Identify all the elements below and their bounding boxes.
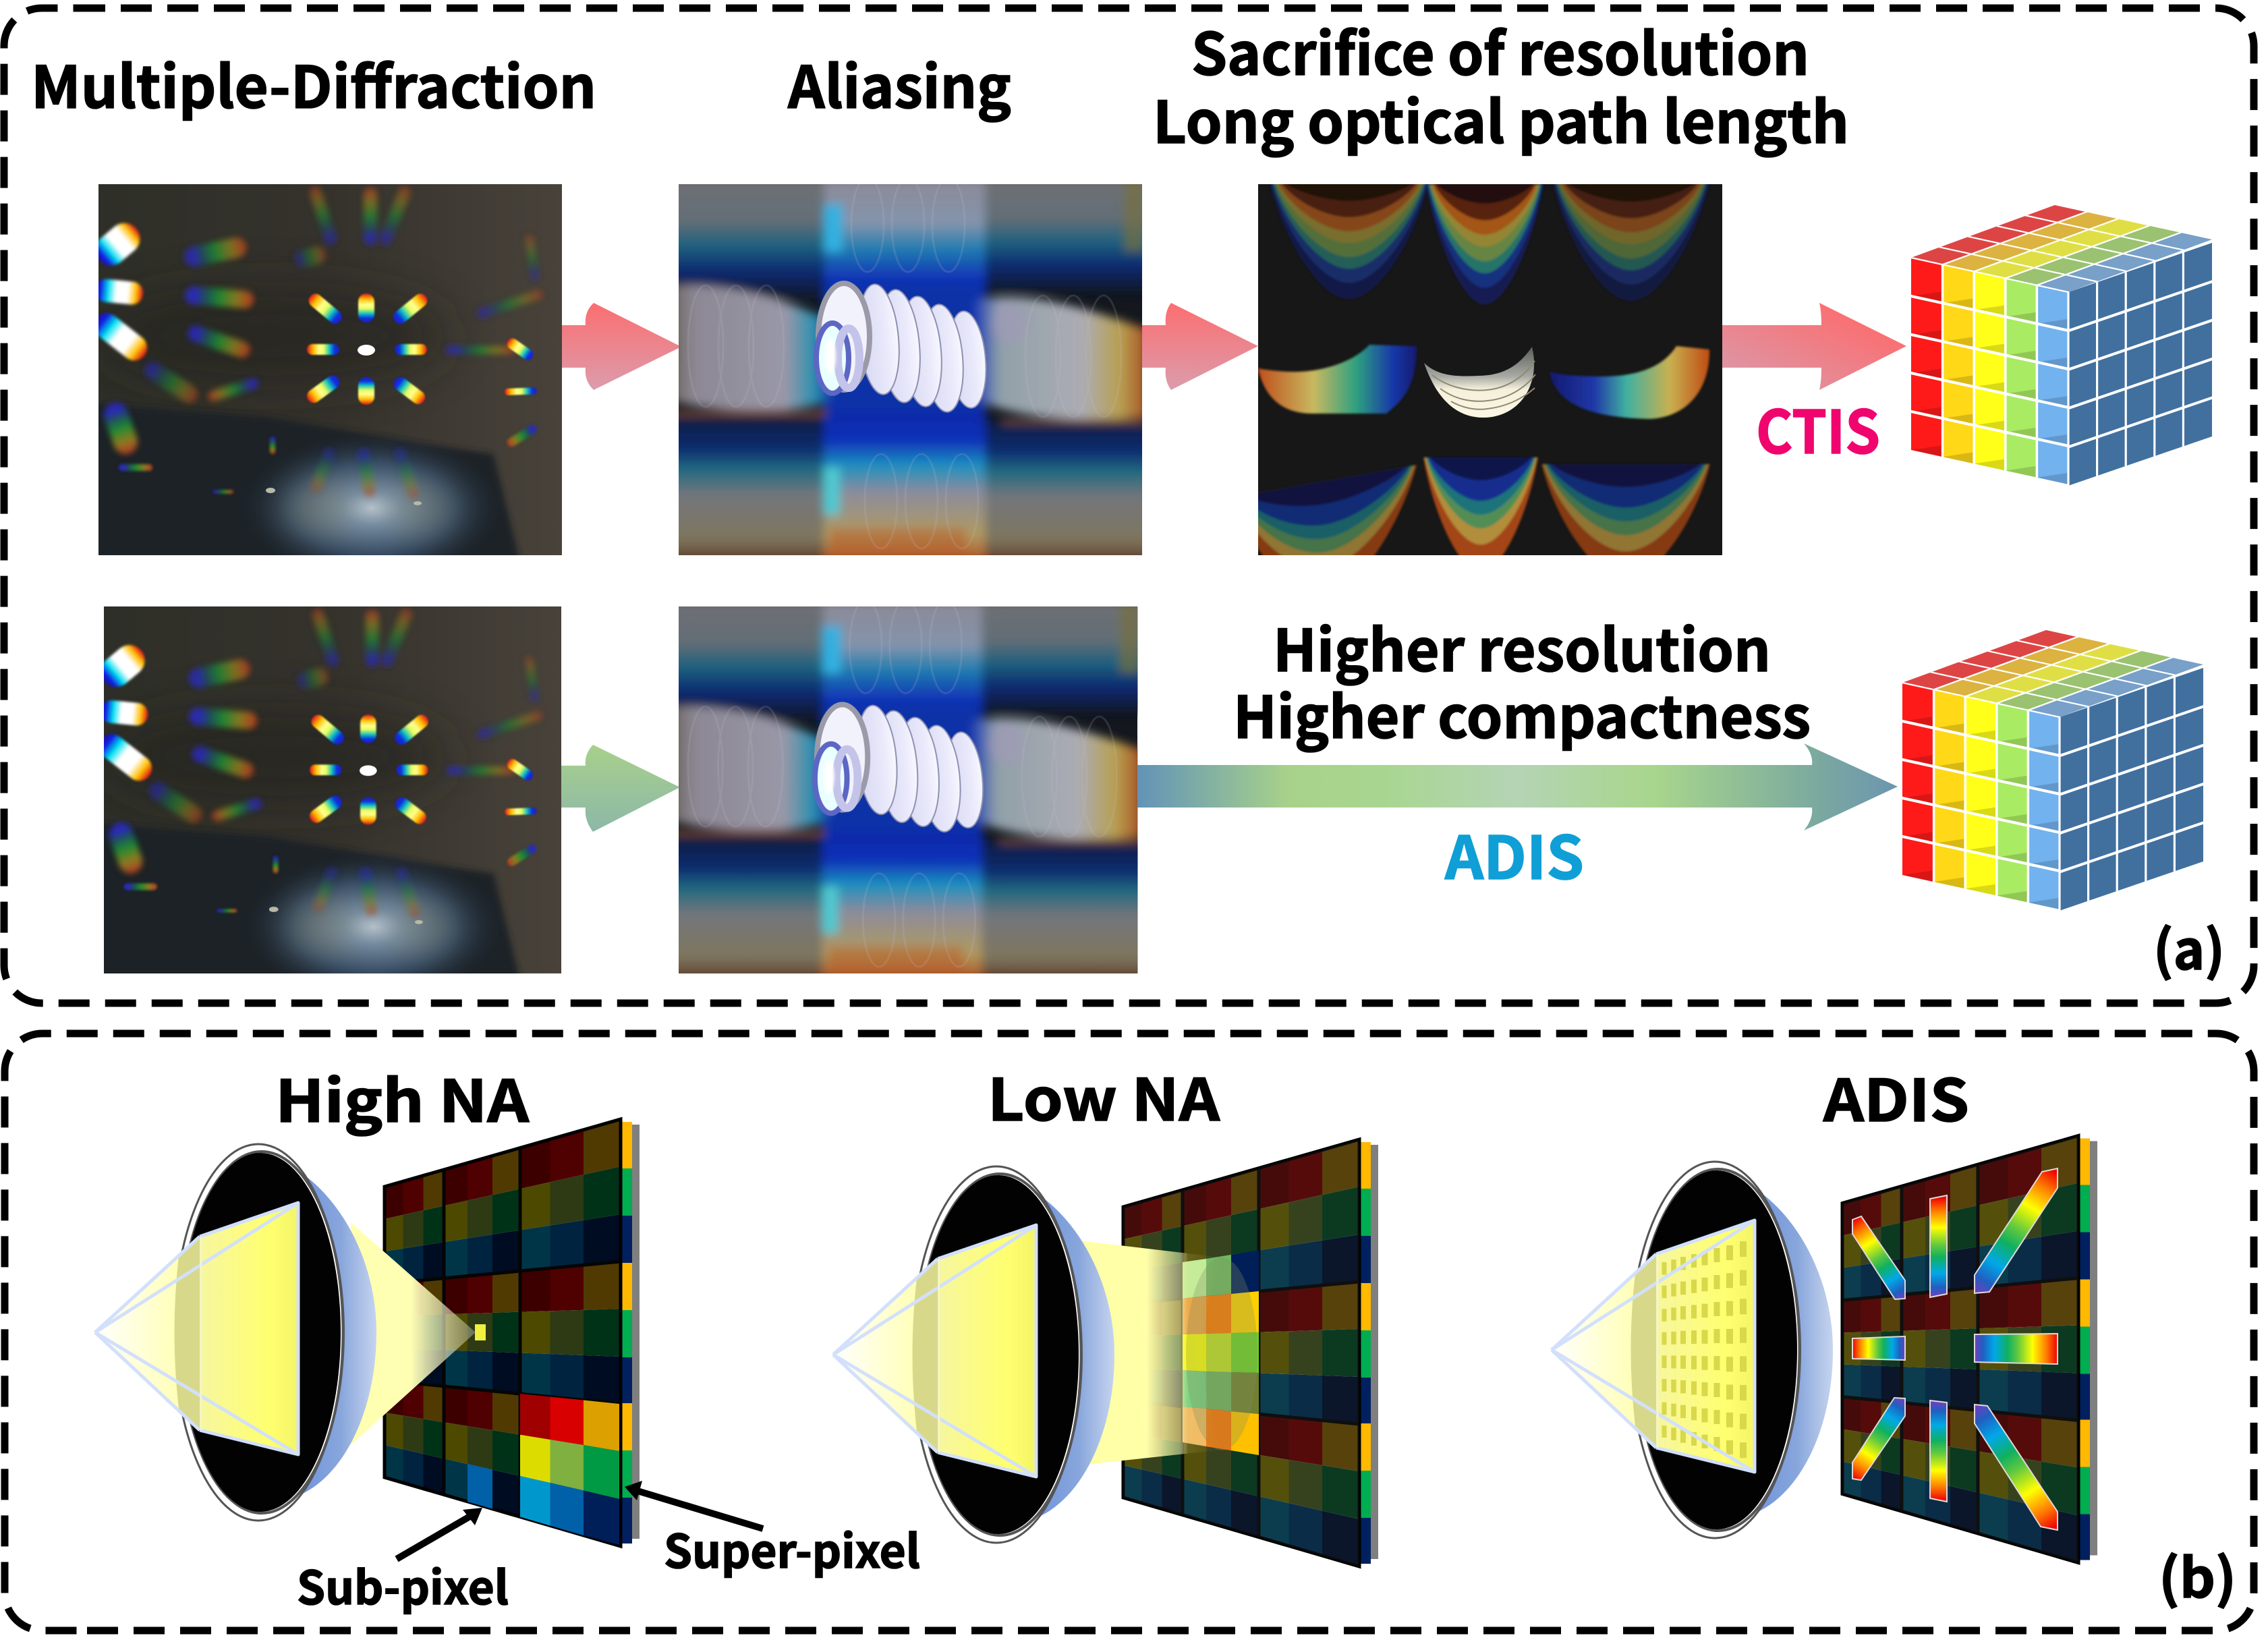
diagram: ADIS aperture coding xyxy=(1552,1136,2097,1562)
coded aperture dot array xyxy=(1664,1241,1743,1459)
incident light pyramid xyxy=(833,1225,1036,1477)
arrow: sub-pixel pointer xyxy=(397,1508,482,1559)
photo: aliased bulb image, top row xyxy=(665,177,1151,562)
panel (a): CTIS versus ADIS pipeline xyxy=(4,7,2254,1003)
panel (b): optical comparison of High NA, Low NA and ADIS xyxy=(5,1034,2254,1631)
panel (b) dashed frame xyxy=(5,1034,2254,1631)
arrow: CTIS reconstruction xyxy=(1722,303,1906,390)
converging beam onto a single sub-pixel xyxy=(351,1222,476,1445)
illuminated ellipse on detector xyxy=(1186,1257,1257,1450)
heading: Long optical path length: Long optical path length xyxy=(1153,76,1849,160)
label: ADIS: ADIS xyxy=(1444,811,1584,897)
pyramid edges xyxy=(1552,1220,1755,1472)
icon: CTIS spectral data cube xyxy=(1911,205,2212,486)
focused spot xyxy=(475,1324,486,1340)
panel label (b): (b) xyxy=(2159,1535,2236,1614)
heading: Sacrifice of resolution: Sacrifice of resolution xyxy=(1191,7,1809,92)
detector with super-pixels xyxy=(385,1119,640,1546)
text: Higher resolution: Higher resolution xyxy=(1273,604,1771,688)
heading: ADIS: ADIS xyxy=(1823,1054,1969,1138)
text: Higher compactness: Higher compactness xyxy=(1233,671,1811,755)
heading: Low NA: Low NA xyxy=(988,1053,1220,1137)
heading: Multiple-Diffraction: Multiple-Diffraction xyxy=(31,40,596,125)
heading: High NA: High NA xyxy=(275,1054,530,1139)
lens xyxy=(1631,1162,1833,1538)
label: Sub-pixel: Sub-pixel xyxy=(297,1551,509,1618)
pyramid edges xyxy=(95,1203,298,1454)
photo: multiple diffraction scene, top row xyxy=(85,184,562,586)
arrow: ADIS reconstruction xyxy=(1137,743,1898,830)
arrow: diffraction to aliasing, ADIS row xyxy=(561,745,680,832)
collimated beam xyxy=(1079,1241,1222,1465)
incident light pyramid xyxy=(1552,1220,1755,1472)
label: CTIS: CTIS xyxy=(1756,385,1880,471)
photo: aliased bulb image, bottom row xyxy=(665,600,1146,980)
heading: Aliasing: Aliasing xyxy=(787,40,1011,125)
arrow: diffraction to aliasing xyxy=(562,303,681,390)
panel (a) dashed frame xyxy=(4,8,2254,1003)
pyramid edges xyxy=(833,1225,1036,1477)
icon: ADIS spectral data cube xyxy=(1902,630,2203,911)
incident light pyramid xyxy=(95,1203,298,1454)
illuminated super-pixel cells xyxy=(1123,1139,1359,1566)
rainbow diffraction bars on detector xyxy=(1852,1168,2058,1530)
photo: multiple diffraction scene, bottom row xyxy=(90,606,561,1003)
lens xyxy=(912,1166,1114,1543)
diagram: High NA focusing xyxy=(95,1119,920,1618)
label: Super-pixel: Super-pixel xyxy=(664,1514,920,1581)
photo: CTIS dispersed bulb image xyxy=(1258,184,1722,555)
panel label (a): (a) xyxy=(2153,907,2225,986)
arrow: aliasing to dispersed image xyxy=(1142,303,1258,390)
detector xyxy=(1842,1136,2097,1562)
lens xyxy=(174,1144,376,1521)
diagram: Low NA focusing xyxy=(833,1139,1378,1566)
arrow: super-pixel pointer xyxy=(625,1481,763,1529)
detector xyxy=(1123,1139,1378,1566)
